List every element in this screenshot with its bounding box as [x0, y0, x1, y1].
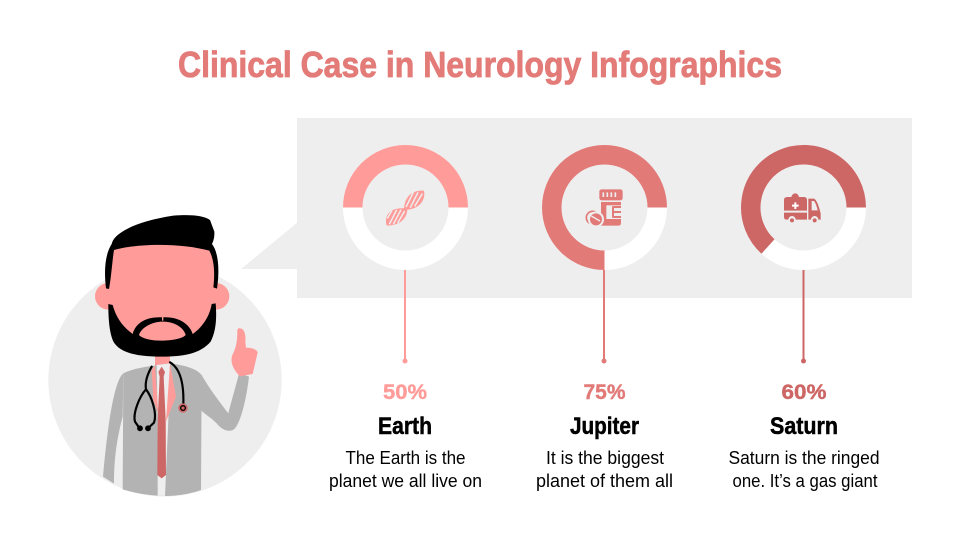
face: [109, 241, 216, 350]
ears: [95, 283, 229, 310]
text block: Saturn: [728, 381, 880, 491]
shirt: [157, 363, 170, 496]
text block: Jupiter: Jupiter: [570, 413, 639, 440]
donut chart: Earth 50%: [353, 155, 458, 260]
tie: [157, 367, 166, 478]
text block: Earth: The Earth is the: [346, 448, 466, 468]
donut chart: Jupiter 75%: [552, 155, 657, 260]
connector: Earth: [402, 270, 408, 364]
neck: [155, 353, 170, 368]
thumb-up hand: [231, 328, 258, 376]
text block: Saturn: Saturn is the ringed: [728, 448, 880, 468]
stethoscope: [135, 362, 183, 430]
collar skin: [152, 363, 176, 422]
text block: Saturn: Saturn: [770, 413, 838, 440]
text block: Earth: 50%: [383, 381, 427, 404]
text block: Saturn: 60%: [782, 381, 827, 404]
text block: Saturn: one. It’s a gas giant: [732, 471, 878, 491]
beard: [108, 303, 216, 357]
doctor illustration: [48, 215, 282, 497]
icon: ambulance: [784, 193, 821, 222]
white coat: [103, 363, 249, 496]
connector: Saturn: [801, 270, 806, 364]
text block: Jupiter: It is the biggest: [546, 448, 664, 468]
text block: Jupiter: 75%: [584, 381, 626, 404]
doctor background circle: [48, 263, 282, 497]
connector: Jupiter: [602, 270, 606, 364]
text block: Earth: [329, 381, 482, 491]
text block: Earth: planet we all live on: [329, 471, 482, 491]
title: Clinical Case in Neurology Infographics: [178, 44, 782, 85]
icon: DNA: [386, 191, 424, 226]
stethoscope chest piece: [178, 403, 188, 413]
icon: medicine bottle: [586, 189, 623, 227]
text block: Jupiter: planet of them all: [536, 471, 673, 491]
text block: Earth: Earth: [378, 413, 432, 440]
text block: Jupiter: [536, 381, 673, 491]
hair: [105, 215, 218, 289]
donut chart: Saturn 60%: [751, 155, 856, 260]
panel: speech bubble: [241, 118, 912, 298]
